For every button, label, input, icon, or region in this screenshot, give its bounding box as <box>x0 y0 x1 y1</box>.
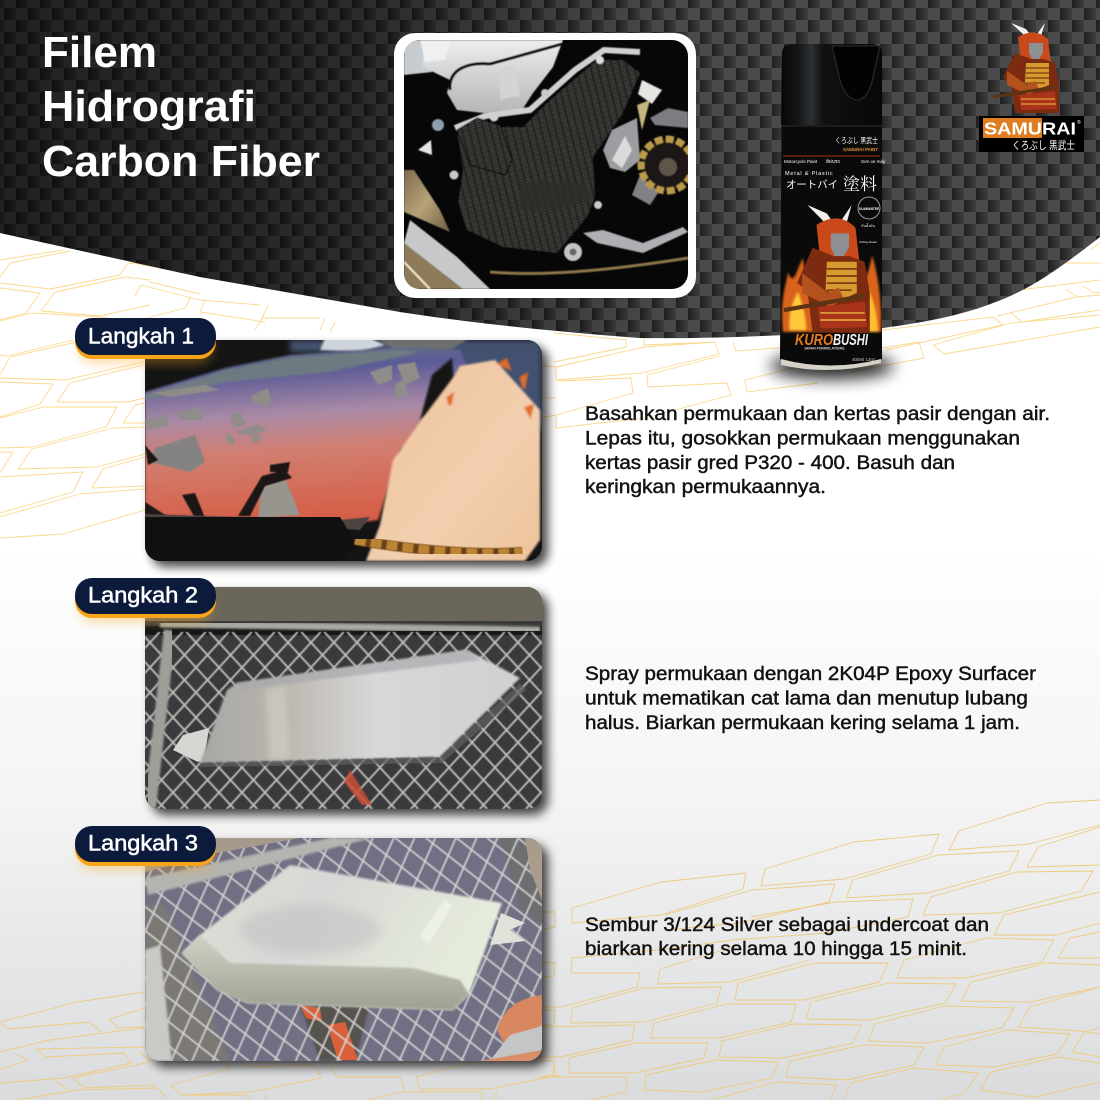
text: step 1 instructions: kertas pasir gred P320 - 400. Basuh dan <box>585 452 955 474</box>
bracelet <box>355 540 522 553</box>
can label text: Motorcycle Paint <box>784 159 818 164</box>
text: step 3 instructions <box>585 914 989 960</box>
text: step 1 instructions: keringkan permukaannya. <box>585 476 826 498</box>
logo samurai figure <box>993 23 1059 113</box>
step label: Langkah 2 <box>75 578 216 623</box>
text: step 1 instructions: Basahkan permukaan dan kertas pasir dengan air. <box>585 403 1050 425</box>
can label text: Metal & Plastic <box>785 171 833 177</box>
silver part <box>173 728 209 762</box>
title: Carbon Fiber <box>42 137 320 186</box>
text: step 2 instructions: halus. Biarkan permukaan kering selama 1 jam. <box>585 712 1020 734</box>
text: step 3 instructions: Sembur 3/124 Silver sebagai undercoat dan <box>585 914 989 936</box>
title <box>42 28 320 186</box>
carbon fibre header panel <box>0 0 1100 338</box>
carbon cover <box>457 60 640 253</box>
can label text: GUARANTEE <box>859 207 879 211</box>
can body: 400ml 13oz <box>852 357 876 362</box>
decorative hexagon line pattern <box>0 243 1100 1100</box>
hand and spray can nozzle <box>497 995 542 1045</box>
step label: Langkah 3 <box>75 826 216 871</box>
title: Hidrografi <box>42 82 256 131</box>
text: step 1 instructions <box>585 403 1050 498</box>
sprocket and chain <box>603 118 640 172</box>
title: Filem <box>42 28 157 77</box>
can body <box>780 44 886 370</box>
can label text: 塗料 <box>843 170 877 195</box>
framed photo: carbon engine cover <box>394 33 696 298</box>
can label text: くろぶし 黑武士 <box>835 135 878 145</box>
brand mark on can: KURO <box>795 332 833 349</box>
hand <box>366 360 540 561</box>
can label text: สีพ่นรถ <box>826 159 840 164</box>
panel: step 3 photo <box>145 838 548 1067</box>
aluminium rim <box>455 50 640 128</box>
can label text: オートバイ <box>786 179 838 191</box>
can label text: Sơn xe máy <box>861 159 886 164</box>
samurai on can <box>784 205 870 333</box>
can ground shadow <box>770 353 894 379</box>
text: step 1 instructions: Lepas itu, gosokkan permukaan menggunakan <box>585 428 1020 450</box>
can label text: กันน้ำมัน <box>861 223 875 228</box>
text: step 2 instructions: untuk mematikan cat lama dan menutup lubang <box>585 688 1028 710</box>
panel: step 1 photo <box>145 338 548 567</box>
gear lever and bolt <box>583 227 688 253</box>
primed part <box>490 913 525 945</box>
product: spray can <box>770 44 894 379</box>
step label: Langkah 2: Langkah 2 <box>88 582 198 608</box>
text: step 2 instructions: Spray permukaan dengan 2K04P Epoxy Surfacer <box>585 663 1037 685</box>
flames <box>782 255 881 332</box>
logo badge: ® <box>1077 119 1081 126</box>
exhaust pipes <box>404 170 450 232</box>
logo badge: くろぶし 黑武士 <box>1012 139 1075 152</box>
panel: step 2 photo <box>145 587 548 815</box>
can body: JAPAN FORMULATIONS <box>804 346 845 350</box>
text: step 3 instructions: biarkan kering selama 10 hingga 15 minit. <box>585 938 967 960</box>
text: step 2 instructions <box>585 663 1037 734</box>
brand mark on can <box>795 332 868 349</box>
can label text <box>784 135 886 244</box>
brand mark on can: BUSHI <box>833 332 868 349</box>
engine block <box>404 40 432 75</box>
step label: Langkah 3: Langkah 3 <box>88 830 198 856</box>
logo badge: SAMURAI <box>984 118 1076 138</box>
brand logo <box>979 23 1084 152</box>
logo badge <box>979 116 1084 152</box>
can label text: SAMURAI PAINT <box>843 147 878 152</box>
can base ring <box>781 359 881 370</box>
step label: Langkah 1: Langkah 1 <box>88 324 194 348</box>
can label text: Chống khoan <box>859 240 877 244</box>
step label: Langkah 1 <box>75 318 216 364</box>
